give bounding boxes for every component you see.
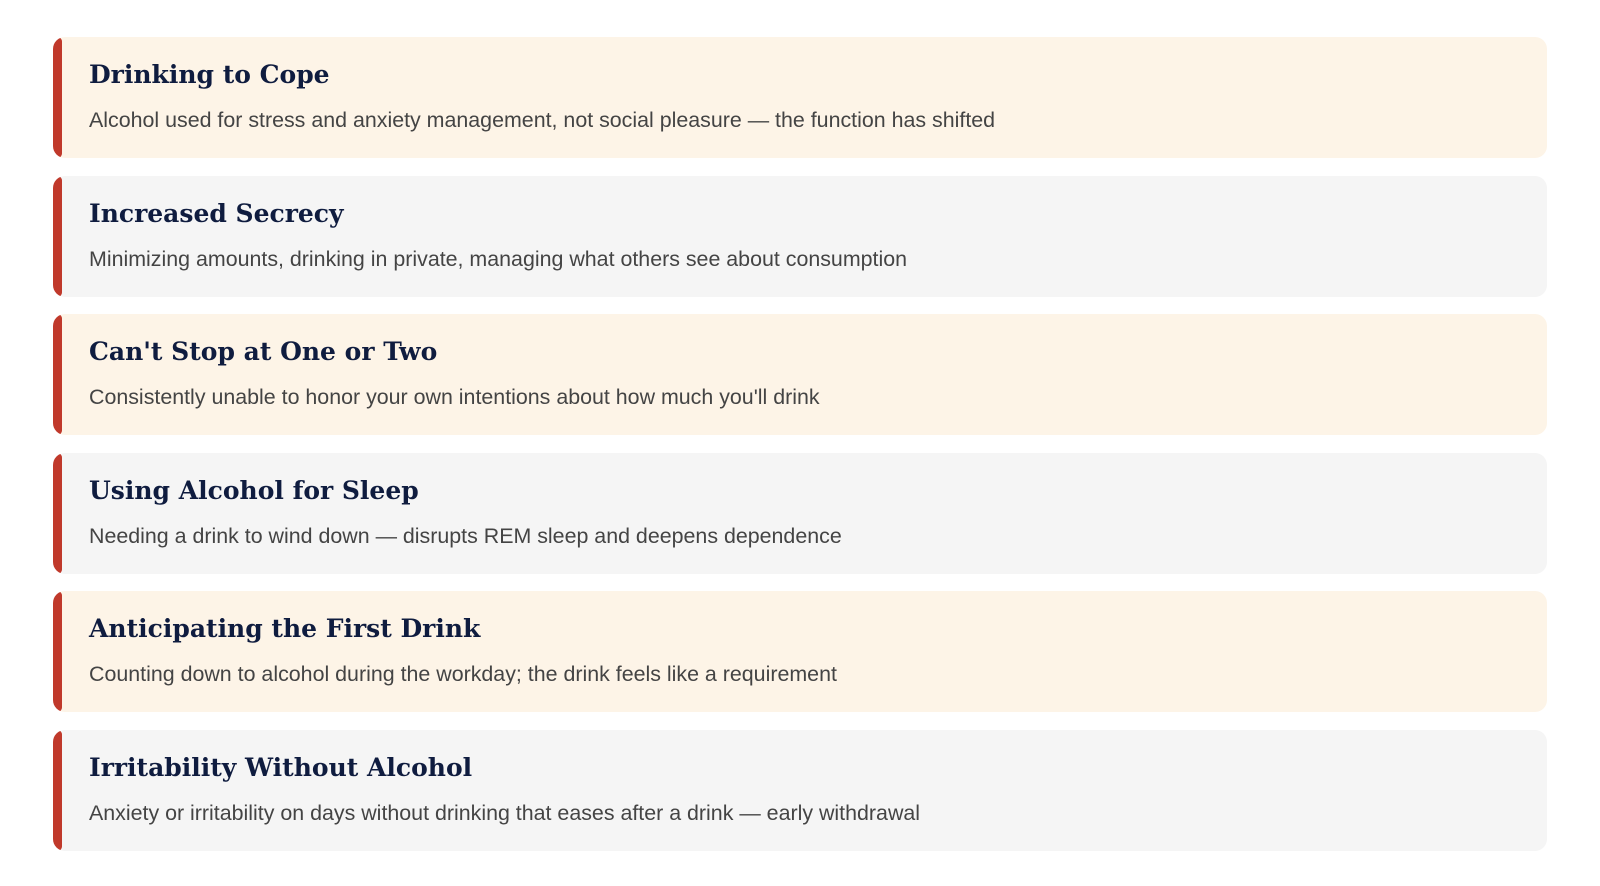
card: Drinking to Cope <box>53 37 1547 158</box>
card: Can't Stop <box>53 314 1547 435</box>
card: Irritability <box>53 730 1547 850</box>
description: Consistently unable to honor your own intentions about how much you'll drink <box>89 385 820 409</box>
description: Anxiety or irritability on days without drinking that eases after a drink — early withdrawal <box>89 800 920 824</box>
heading: Drinking to Cope <box>89 60 330 89</box>
description: Minimizing amounts, drinking in private, managing what others see about consumption <box>89 246 907 270</box>
description: Counting down to alcohol during the workday; the drink feels like a requirement <box>89 662 837 686</box>
heading: Anticipating the First Drink <box>89 614 480 643</box>
heading: Using Alcohol for Sleep <box>89 476 419 504</box>
description: Alcohol used for stress and anxiety management, not social pleasure — the function has shifted <box>89 108 995 132</box>
card: Sleep <box>53 452 1547 574</box>
card: Anticipating <box>53 591 1547 712</box>
heading: Irritability Without Alcohol <box>89 752 472 782</box>
heading: Can't Stop at One or Two <box>89 337 437 366</box>
description: Needing a drink to wind down — disrupts REM sleep and deepens dependence <box>89 524 842 548</box>
heading: Increased Secrecy <box>89 198 344 228</box>
card: Increased Secrecy <box>53 176 1547 296</box>
